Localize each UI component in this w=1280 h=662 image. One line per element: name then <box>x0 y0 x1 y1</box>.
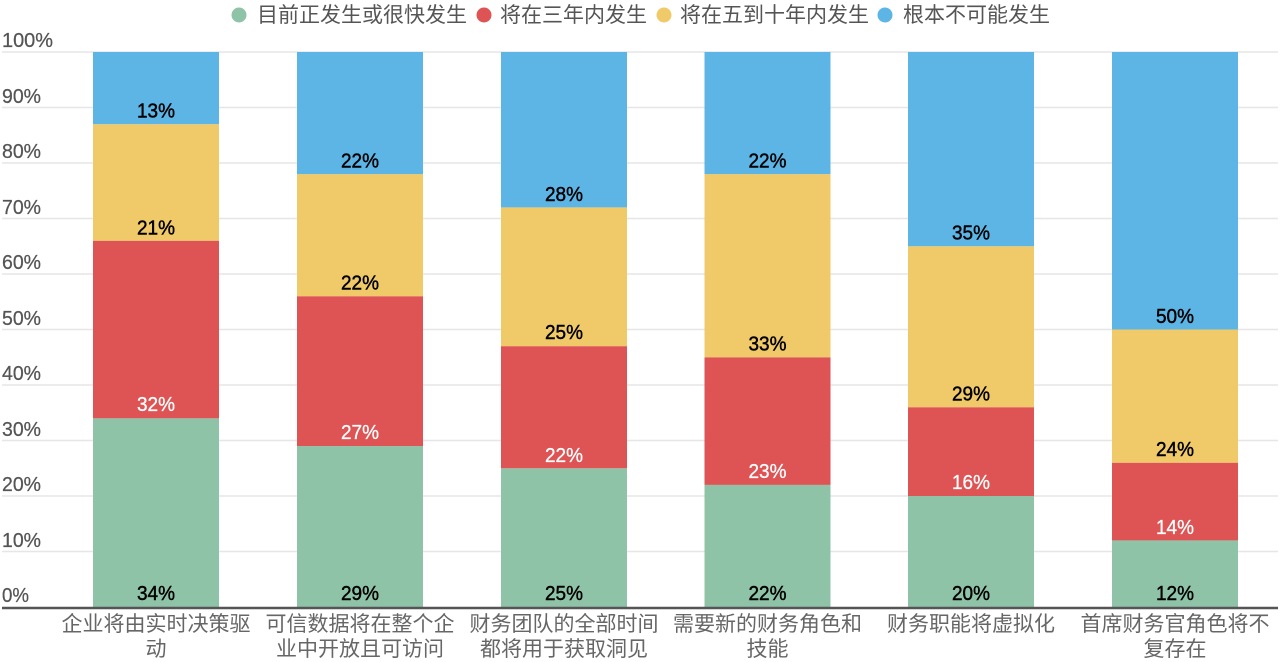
y axis labels: 30% <box>2 419 41 441</box>
bar 5: 35% <box>952 222 990 244</box>
bar 1: 34% <box>137 583 175 605</box>
bar 6: 14% <box>1156 517 1194 539</box>
y axis labels: 80% <box>2 141 41 163</box>
y axis labels: 10% <box>2 530 41 552</box>
bar 2: 27% <box>341 422 379 444</box>
bar 4: 22% <box>748 583 787 605</box>
bar 5: 16% <box>952 472 990 494</box>
bar 3: 22% <box>545 445 583 467</box>
bar 3: 25% <box>545 322 583 344</box>
y axis labels <box>2 30 53 607</box>
bar 3 <box>501 52 627 607</box>
bar 5: 20% <box>952 583 990 605</box>
category 1: 动 <box>146 638 166 661</box>
legend item: within three years: 将在三年内发生 <box>500 4 647 27</box>
bar 1: 32% <box>137 394 175 416</box>
y axis labels: 40% <box>2 363 41 385</box>
bar 6 <box>1112 52 1238 607</box>
bar 6: 12% <box>1156 583 1194 605</box>
bar 1: 13% <box>137 100 175 122</box>
y axis labels: 100% <box>2 30 53 52</box>
bar 2: 29% <box>341 583 379 605</box>
category 2 <box>266 613 454 661</box>
bar 6: 50% <box>1156 306 1194 328</box>
bar 5 <box>908 52 1034 607</box>
y axis labels: 90% <box>2 86 41 108</box>
legend <box>232 4 1050 27</box>
bar 3: 28% <box>545 184 583 206</box>
bar 1 <box>93 52 219 607</box>
legend item: never: 根本不可能发生 <box>903 4 1050 27</box>
category 6 <box>1080 613 1270 661</box>
bar 3: 25% <box>545 583 583 605</box>
bar 4: 22% <box>748 150 787 172</box>
category 4: 技能 <box>746 638 788 661</box>
legend item: happening now or soon: 目前正发生或很快发生 <box>257 4 467 27</box>
category 3: 都将用于获取洞见 <box>480 638 648 661</box>
category 3: 财务团队的全部时间 <box>470 613 658 636</box>
bar 5: 29% <box>952 384 990 406</box>
y axis labels: 0% <box>2 585 29 607</box>
category 1 <box>62 613 250 661</box>
bar 1: 21% <box>137 218 175 240</box>
category labels <box>62 613 1270 661</box>
category 1: 企业将由实时决策驱 <box>62 613 250 636</box>
category 3 <box>470 613 658 661</box>
bar 2: 22% <box>341 272 379 294</box>
bar 4: 33% <box>748 334 787 356</box>
category 2: 可信数据将在整个企 <box>266 613 454 636</box>
category 4 <box>673 613 862 661</box>
category 5: 财务职能将虚拟化 <box>887 613 1055 636</box>
y axis labels: 70% <box>2 197 41 219</box>
bar 6: 24% <box>1156 439 1194 461</box>
category 6: 复存在 <box>1144 638 1206 661</box>
bar 2: 22% <box>341 150 379 172</box>
category 6: 首席财务官角色将不 <box>1080 613 1270 636</box>
bar 4: 23% <box>748 461 787 483</box>
bar 2 <box>297 52 423 607</box>
category 2: 业中开放且可访问 <box>276 638 444 661</box>
y axis labels: 60% <box>2 252 41 274</box>
y axis labels: 50% <box>2 308 41 330</box>
bar 4 <box>704 52 830 607</box>
category 4: 需要新的财务角色和 <box>673 613 862 636</box>
legend item: in five to ten years: 将在五到十年内发生 <box>680 4 869 27</box>
y axis labels: 20% <box>2 474 41 496</box>
